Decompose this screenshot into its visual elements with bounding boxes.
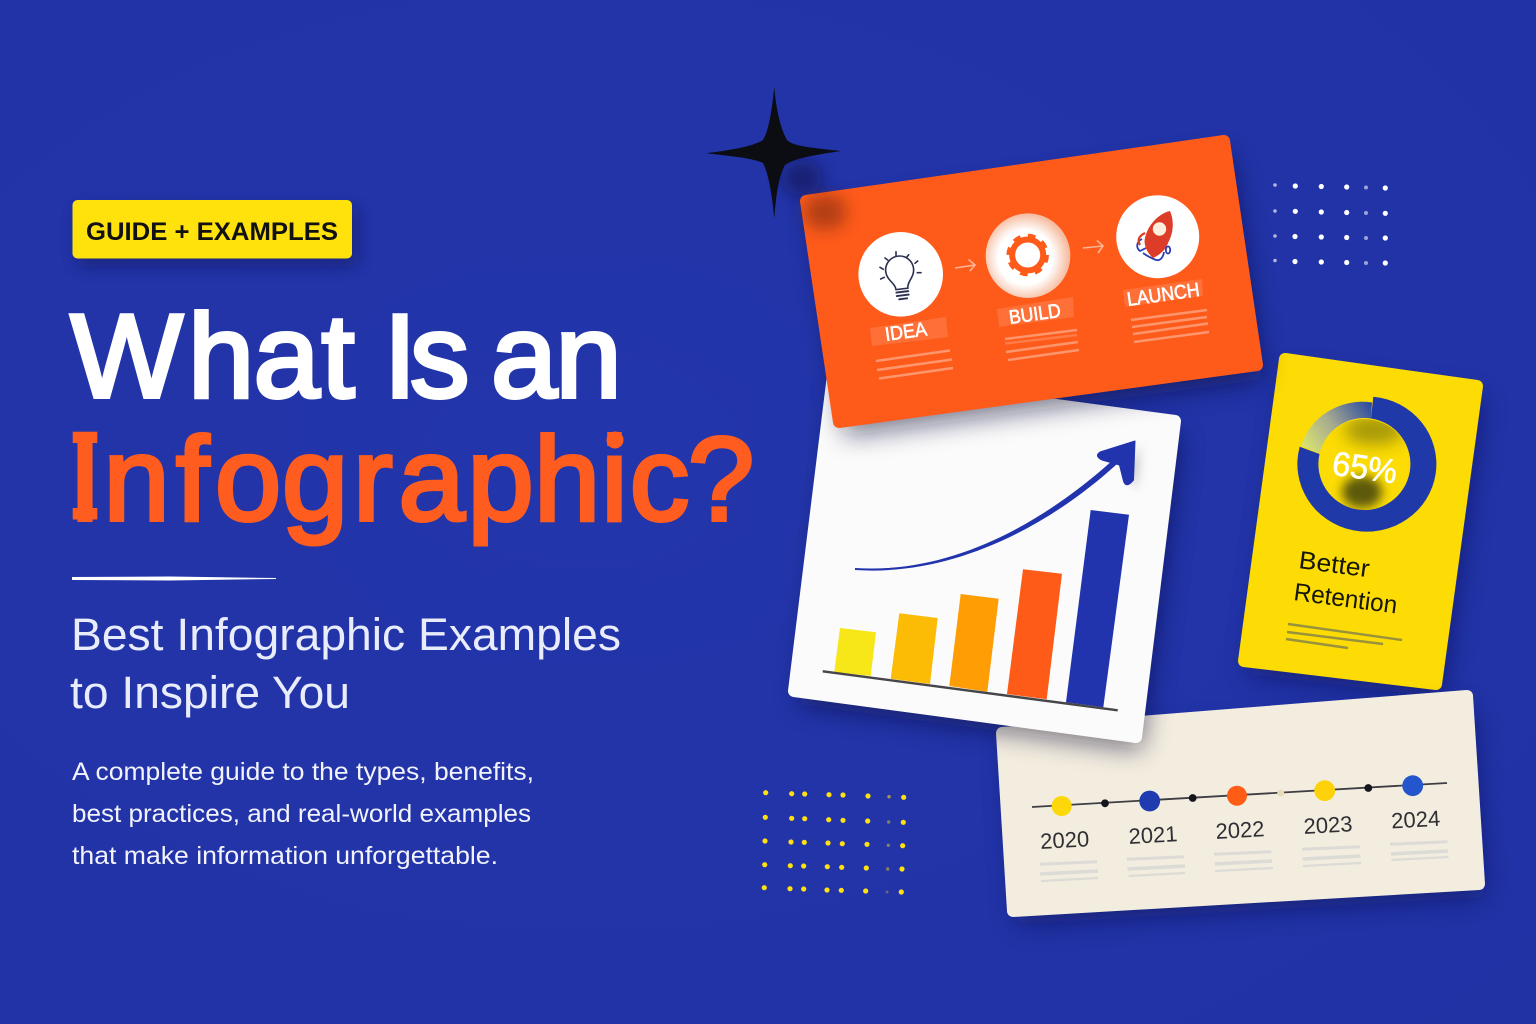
- trend arrow: [855, 441, 1140, 571]
- title: [0, 290, 754, 546]
- year labels: 2021: [1128, 821, 1178, 849]
- step: launch: [1116, 195, 1209, 342]
- arrow: idea to build: [955, 260, 975, 271]
- year labels: 2024: [1391, 806, 1441, 833]
- step: build: BUILD: [1008, 300, 1062, 329]
- panel: yellow retention card: [1244, 359, 1482, 697]
- donut chart: 65%: [1297, 397, 1436, 532]
- year labels: 2020: [1040, 826, 1090, 854]
- subtitle: Best Infographic Examples: [71, 609, 621, 660]
- decoration: yellow dot grid: [762, 790, 906, 895]
- description: best practices, and real-world examples: [72, 800, 531, 828]
- description: that make information unforgettable.: [72, 842, 498, 870]
- icon: gear: [1009, 236, 1047, 274]
- description: [72, 758, 534, 870]
- panel: cream timeline card: [1002, 696, 1484, 924]
- timeline axis: [1032, 783, 1447, 807]
- label: better retention: [1292, 546, 1399, 620]
- year labels: 2022: [1215, 816, 1265, 844]
- bar chart: [823, 510, 1129, 710]
- divider rule: [72, 576, 276, 580]
- step: idea: [858, 232, 953, 378]
- step: idea: IDEA: [884, 318, 928, 346]
- panel: white bar chart card: [794, 375, 1180, 750]
- description: A complete guide to the types, benefits,: [72, 758, 534, 786]
- text lines: [1286, 624, 1402, 648]
- donut chart: 65%: 65%: [1330, 445, 1400, 491]
- label: better retention: Better: [1297, 546, 1371, 583]
- year labels: 2023: [1303, 811, 1353, 839]
- step: build: [986, 213, 1079, 360]
- subtitle: to Inspire You: [70, 667, 350, 718]
- icon: black four-point star: [706, 86, 841, 218]
- tag: guide + examples: GUIDE + EXAMPLES: [86, 218, 338, 246]
- panel: orange process card: [803, 141, 1263, 436]
- year text lines: [1040, 842, 1448, 881]
- icon: light bulb: [880, 252, 921, 301]
- tag: guide + examples: [72, 200, 358, 266]
- year labels: [1040, 806, 1441, 854]
- star shadow on card: [803, 194, 847, 230]
- icon: rocket: [1137, 211, 1173, 260]
- decoration: white dot grid: [1273, 183, 1388, 266]
- arrow: build to launch: [1083, 240, 1103, 253]
- title: Infographic?: [68, 413, 754, 546]
- timeline markers: [1052, 775, 1423, 816]
- label: better retention: Retention: [1292, 578, 1399, 620]
- step: launch: LAUNCH: [1126, 279, 1201, 311]
- title: What Is an: [0, 290, 622, 423]
- subtitle: [70, 609, 621, 718]
